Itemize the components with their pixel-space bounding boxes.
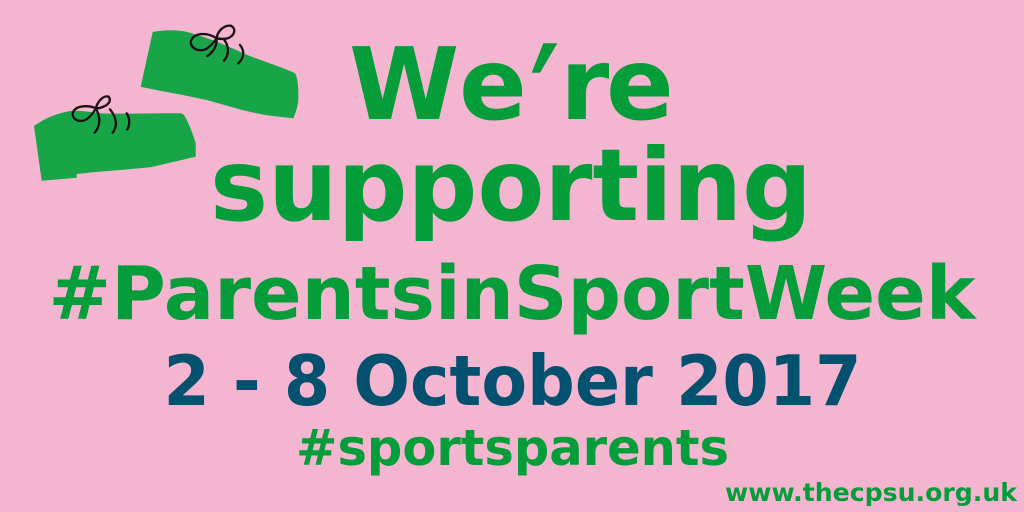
heading: supporting: supporting <box>210 127 812 244</box>
hashtag: sportsparents: #sportsparents <box>296 419 729 477</box>
date: 2 - 8 October 2017 <box>164 341 862 422</box>
heading: We're: We’re <box>349 26 674 143</box>
website: www.thecpsu.org.uk <box>725 478 1018 507</box>
hashtag: ParentsinSportWeek: #ParentsinSportWeek <box>48 251 977 337</box>
icon: lower shoe <box>34 96 196 181</box>
icon: upper shoe <box>141 26 298 118</box>
